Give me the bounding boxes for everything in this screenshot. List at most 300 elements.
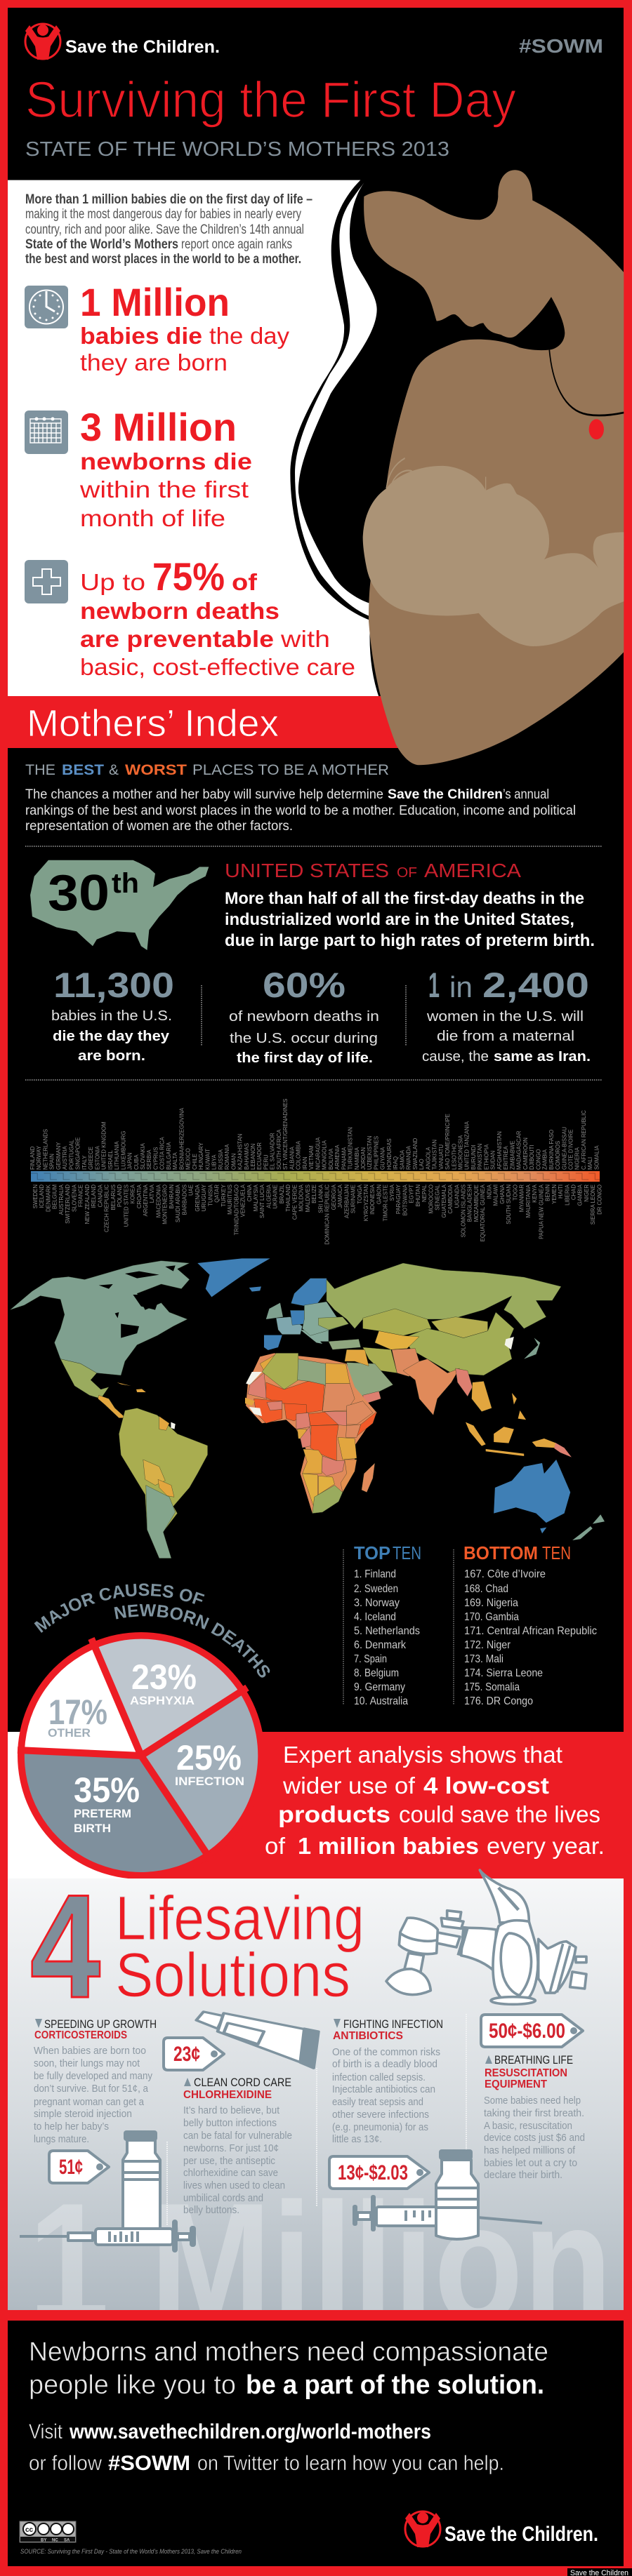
labels below strip: DENMARK: [45, 1184, 52, 1212]
list: bottom ten countries: 167. Côte d’Ivoire: [464, 1568, 546, 1580]
labels above strip: NETHERLANDS: [42, 1129, 49, 1170]
South Sudan and Ethiopia: [324, 1412, 347, 1426]
call to action text: Newborns and mothers need compassionate: [29, 2337, 548, 2367]
stat: 3 million: newborns die: [80, 448, 252, 474]
panel: call to action footer: [8, 2321, 624, 2566]
labels above strip: SOMALIA: [593, 1145, 600, 1170]
labels above strip: COSTA RICA: [159, 1137, 166, 1170]
labels above strip: KUWAIT: [204, 1149, 211, 1170]
heading: United States of America: AMERICA: [424, 860, 521, 881]
labels below strip: CAMBODIA: [447, 1184, 454, 1214]
column: resuscitation equipment: device costs just $6 and: [484, 2132, 585, 2144]
labels below strip: MAURITIUS: [227, 1184, 233, 1215]
column: resuscitation equipment: [484, 2053, 585, 2181]
stat: 1 in 2,400: [422, 966, 591, 1065]
labels above strip: GERMANY: [55, 1142, 62, 1170]
Central Asia: [375, 1331, 419, 1349]
Guianas: [159, 1416, 169, 1430]
stat: 11,300: are born.: [78, 1048, 145, 1064]
stat: 1 million: [80, 280, 290, 375]
labels above strip: SERBIA: [146, 1149, 152, 1170]
intro text: State of the World’s Mothers: [25, 237, 178, 252]
Mauritania: [248, 1373, 267, 1399]
labels above strip: ITALY: [81, 1155, 88, 1170]
slice label: other: 17%: [48, 1693, 107, 1732]
Indonesia: [466, 1393, 556, 1456]
column: chlorhexidine: belly button infections: [183, 2117, 277, 2129]
labels below strip: CANADA: [97, 1184, 103, 1207]
labels below strip: CAPE VERDE: [291, 1184, 298, 1220]
labels above strip: TAJIKISTAN: [432, 1140, 438, 1170]
labels above strip: TURKMENISTAN: [347, 1127, 354, 1170]
labels above strip: RWANDA: [406, 1145, 412, 1170]
intro text: report once again ranks: [181, 237, 292, 252]
New Zealand: [572, 1514, 605, 1540]
hashtag: #SOWM: [519, 35, 603, 57]
labels below strip: UAE: [188, 1184, 195, 1196]
labels above strip: CUBA: [133, 1154, 140, 1170]
labels above strip: SUDAN: [490, 1151, 496, 1170]
labels below strip: LIBERIA: [564, 1184, 570, 1206]
Central America: [98, 1395, 126, 1418]
Arabia: [347, 1363, 393, 1399]
intro paragraph: [25, 787, 576, 834]
labels below strip: PAPUA NEW GUINEA: [538, 1184, 544, 1239]
column: resuscitation equipment: BREATHING LIFE: [494, 2053, 573, 2067]
North America: [10, 1261, 190, 1375]
panel: United States: [30, 860, 595, 1066]
Africa base: [246, 1353, 377, 1514]
intro paragraph: The chances a mother and her baby will survive help determine: [25, 787, 383, 802]
stat: 11,300: die the day they: [53, 1029, 170, 1044]
callout: expert analysis: every year.: [487, 1833, 605, 1859]
labels above strip: PORTUGAL: [68, 1140, 74, 1170]
column: corticosteroids: soon, their lungs may not: [34, 2057, 140, 2069]
column: antibiotics: other severe infections: [332, 2109, 429, 2121]
Algeria: [262, 1353, 298, 1389]
labels below strip: MACEDONIA: [156, 1184, 162, 1217]
British Isles: [266, 1303, 283, 1319]
Myanmar: [456, 1368, 473, 1396]
China: [403, 1312, 514, 1375]
labels below strip: DR CONGO: [596, 1184, 603, 1215]
labels above strip: PHILIPPINES: [374, 1136, 379, 1170]
Tasmania: [540, 1528, 546, 1533]
column: resuscitation equipment: RESUSCITATION: [485, 2067, 567, 2079]
list: top ten countries: 7. Spain: [354, 1653, 387, 1665]
labels below strip: UNITED STATES: [123, 1184, 129, 1227]
labels below strip: MOLDOVA: [298, 1184, 305, 1211]
pendant: [589, 419, 604, 439]
panel: white intro background with hair line: [8, 180, 379, 698]
badge: Creative Commons: SA: [64, 2539, 70, 2543]
labels above strip: IRAQ: [393, 1156, 399, 1170]
West Africa: [254, 1399, 282, 1423]
Namibia and Botswana: [302, 1474, 317, 1507]
callout: expert analysis: wider use of: [282, 1773, 416, 1798]
Tanzania: [338, 1437, 357, 1460]
labels below strip: AUSTRALIA: [58, 1184, 65, 1215]
labels below strip: SAINT LUCIA: [259, 1184, 265, 1218]
column: antibiotics: [332, 2017, 443, 2145]
list: top ten countries: 9. Germany: [354, 1681, 405, 1693]
labels above strip: PAKISTAN: [477, 1144, 483, 1170]
list: bottom ten countries: 168. Chad: [464, 1583, 508, 1595]
South America: [119, 1408, 208, 1558]
band: white left of pie: [8, 1732, 148, 1878]
Italy and Balkans: [301, 1330, 329, 1344]
band: red expert analysis background: [141, 1732, 624, 1878]
labels below strip: BELIZE: [311, 1184, 317, 1203]
labels below strip: BELARUS: [110, 1184, 117, 1210]
labels above strip: COTE D’IVOIRE: [567, 1129, 574, 1170]
callout: expert analysis: 1 million babies: [298, 1833, 479, 1859]
labels below strip: NIGER: [584, 1184, 590, 1202]
intro text: country, rich and poor alike. Save the Children’s 14th annual: [25, 222, 304, 237]
subheading: best and worst: WORST: [125, 762, 187, 778]
intro paragraph: Save the Children: [388, 787, 503, 802]
Zambia: [322, 1456, 345, 1476]
subheading: best and worst: PLACES TO BE A MOTHER: [192, 762, 389, 778]
Middle East: [345, 1349, 369, 1366]
band: red strip below solutions: [0, 2310, 632, 2321]
call to action text: be a part of the solution.: [246, 2370, 544, 2400]
labels above strip: KAZAKHSTAN: [237, 1134, 243, 1170]
labels below strip: BANGLADESH: [467, 1184, 473, 1222]
stat: 1 in 2,400: women in the U.S. will: [426, 1009, 584, 1025]
labels above strip: BAHAMAS: [244, 1143, 250, 1170]
labels above strip: ECUADOR: [256, 1142, 263, 1170]
labels above strip: SAMOA: [399, 1149, 405, 1170]
column: antibiotics: One of the common risks: [332, 2046, 440, 2058]
Argentina and Chile: [146, 1486, 176, 1559]
US summary text: due in large part to high rates of preterm birth.: [225, 931, 595, 950]
labels below strip: GHANA: [499, 1184, 506, 1204]
labels below strip: EQUATORIAL GUINEA: [480, 1184, 486, 1241]
subheading: best and worst: [25, 762, 389, 778]
labels above strip: OMAN: [230, 1154, 237, 1170]
labels below strip: PARAGUAY: [395, 1184, 402, 1214]
labels below strip: YEMEN: [551, 1184, 558, 1204]
Bolivia and Paraguay: [143, 1460, 165, 1486]
labels below strip: GABON: [376, 1184, 382, 1204]
column: corticosteroids: SPEEDING UP GROWTH: [44, 2017, 157, 2031]
labels below strip: BENIN: [545, 1184, 551, 1201]
Iceland: [249, 1286, 261, 1292]
icon: calendar: [25, 411, 68, 454]
stat: 3 million: [79, 405, 252, 531]
labels below strip: AZERBAIJAN: [343, 1184, 350, 1218]
labels below strip: POLAND: [117, 1184, 123, 1207]
labels below strip: MAURITANIA: [525, 1184, 532, 1218]
heading: top ten: TEN: [393, 1542, 421, 1563]
stat: 75 percent: [80, 554, 355, 680]
column: antibiotics: Injectable antibiotics can: [332, 2083, 435, 2095]
Scandinavia: [291, 1279, 329, 1307]
stat: 75 percent: basic, cost-effective care: [80, 654, 355, 680]
labels below strip: MOZAMBIQUE: [473, 1184, 480, 1222]
labels above strip: ANGOLA: [425, 1147, 431, 1170]
labels above strip: CHILE: [192, 1154, 198, 1170]
labels below strip: IRELAND: [91, 1184, 97, 1208]
callout: expert analysis: could save the lives: [399, 1801, 600, 1827]
call to action text: people like you to: [29, 2370, 236, 2400]
list: bottom ten countries: 175. Somalia: [464, 1681, 520, 1693]
chart: country ranking strip: [29, 1099, 603, 1245]
labels below strip: BARBADOS: [181, 1184, 187, 1215]
labels below strip: ARGENTINA: [143, 1184, 149, 1217]
logo: Save the Children footer: Save the Children.: [445, 2523, 598, 2546]
price tag: 13 cents to 2.03 dollars: 13¢-$2.03: [338, 2161, 408, 2184]
labels above strip: GREECE: [88, 1147, 94, 1170]
Mozambique: [341, 1460, 357, 1493]
call to action text: on Twitter to learn how you can help.: [197, 2452, 504, 2475]
labels above strip: MONGOLIA: [322, 1140, 328, 1170]
labels above strip: MALTA: [172, 1152, 178, 1170]
labels above strip: LUXEMBOURG: [120, 1131, 126, 1170]
labels below strip: GAMBIA: [577, 1184, 584, 1206]
labels above strip: LEBANON: [250, 1144, 256, 1170]
column: resuscitation equipment: A basic, resuscitation: [484, 2120, 572, 2132]
stat: 1 million: they are born: [80, 349, 228, 375]
labels above strip: IRAN: [302, 1156, 308, 1170]
heading: United States of America: [225, 860, 521, 881]
icon: clock: [25, 286, 68, 328]
price tag: 51 cents: [49, 2151, 109, 2183]
labels above strip: COMOROS: [555, 1141, 561, 1170]
labels above strip: JORDAN: [360, 1147, 367, 1170]
labels below strip: QATAR: [214, 1184, 220, 1203]
Western Europe: [276, 1317, 302, 1335]
labels below strip: KENYA: [532, 1184, 538, 1203]
labels above strip: SWAZILAND: [412, 1137, 419, 1170]
necklace: [549, 350, 624, 415]
labels above strip: NICARAGUA: [315, 1137, 321, 1170]
labels below strip: MALDIVES: [305, 1184, 311, 1212]
stat: 1 million: babies die: [80, 323, 202, 349]
Turkey: [329, 1339, 361, 1349]
Madagascar: [362, 1463, 375, 1493]
call to action text: Visit: [29, 2420, 63, 2443]
heading: United States of America: UNITED STATES: [225, 860, 389, 881]
intro paragraph: representation of women are the other factors.: [25, 819, 293, 834]
labels above strip: AUSTRIA: [62, 1145, 68, 1170]
Central Africa: [308, 1412, 341, 1426]
labels above strip: LITHUANIA: [114, 1140, 120, 1170]
icon: medical cross: [25, 560, 68, 603]
column: resuscitation equipment: declare their birth.: [484, 2169, 562, 2181]
labels below strip: ALGERIA: [265, 1184, 272, 1208]
Gabon and Congo: [298, 1429, 306, 1440]
labels below strip: THAILAND: [285, 1184, 291, 1212]
labels above strip: ZAMBIA: [542, 1149, 548, 1170]
column: chlorhexidine: can be fatal for vulnerable: [183, 2130, 292, 2142]
stat: 1 million: 1 Million: [80, 280, 230, 324]
labels below strip: ICELAND: [39, 1184, 45, 1208]
labels below strip: FRANCE: [78, 1184, 84, 1207]
title: Surviving the First Day: [25, 72, 516, 128]
labels above strip: SLOVAKIA: [140, 1142, 146, 1170]
labels above strip: MALI: [587, 1157, 593, 1170]
Iran: [363, 1347, 397, 1373]
labels below strip: UGANDA: [454, 1184, 460, 1208]
labels below strip: EGYPT: [409, 1184, 415, 1203]
subtitle: STATE OF THE WORLD’S MOTHERS 2013: [25, 138, 449, 161]
slice label: asphyxia: 23%: [131, 1657, 197, 1697]
stat: 75 percent: 75%: [152, 554, 225, 599]
map: United States: [30, 860, 209, 950]
stat: 60%: 60%: [263, 966, 345, 1005]
labels below strip: SENEGAL: [435, 1184, 441, 1210]
list: top ten countries: 3. Norway: [354, 1597, 400, 1609]
logo: Save the Children: [25, 24, 220, 60]
labels above strip: ARMENIA: [334, 1144, 341, 1170]
Mali, Niger and Chad: [266, 1381, 324, 1413]
list: bottom ten countries: 172. Niger: [464, 1639, 511, 1651]
labels below strip: TUNISIA: [207, 1184, 213, 1206]
slice label: infection: 25%: [176, 1738, 242, 1777]
badge: Creative Commons: cc: [25, 2526, 34, 2534]
list: top ten countries: 2. Sweden: [354, 1583, 398, 1595]
price tag: 50 cents to 6 dollars: [481, 2015, 583, 2047]
labels below strip: SOLOMON ISLANDS: [461, 1184, 466, 1237]
heading: bottom ten: BOTTOM: [463, 1542, 538, 1563]
callout: expert analysis: 4 low-cost: [423, 1773, 549, 1798]
Caribbean: [117, 1382, 146, 1392]
panel: top ten: [343, 1542, 421, 1707]
labels below strip: TURKEY: [220, 1184, 227, 1207]
labels below strip: KYRGYZSTAN: [363, 1184, 369, 1221]
labels below strip: DOMINICAN REPUBLIC: [324, 1184, 331, 1245]
labels below strip: MONTENEGRO: [162, 1184, 169, 1224]
labels above strip: MADAGASCAR: [516, 1130, 522, 1170]
labels below strip: CZECH REPUBLIC: [104, 1184, 110, 1232]
Spain: [264, 1335, 282, 1350]
list: bottom ten countries: 170. Gambia: [464, 1611, 519, 1623]
column: chlorhexidine: CHLORHEXIDINE: [183, 2089, 272, 2101]
colour strip: [31, 1171, 600, 1182]
intro paragraph: rankings of the best and worst places in the world to be a mother. Education, income and political: [25, 803, 576, 818]
chart: causes of newborn deaths pie: [18, 1632, 265, 1879]
labels above strip: SINGAPORE: [75, 1137, 81, 1170]
callout: expert analysis: products: [278, 1801, 390, 1827]
labels above strip: NAMIBIA: [354, 1147, 360, 1170]
Papua New Guinea: [554, 1443, 572, 1457]
intro text: More than 1 million babies die on the first day of life –: [25, 192, 312, 207]
call to action text: or follow: [29, 2452, 102, 2475]
labels above strip: GUINEA-BISSAU: [561, 1127, 567, 1170]
labels above strip: BULGARIA: [166, 1142, 172, 1170]
stat: 11,300: 11,300: [53, 966, 174, 1005]
Yemen: [363, 1392, 381, 1404]
labels above strip: JAPAN: [126, 1152, 133, 1170]
Mongolia: [431, 1317, 488, 1338]
stat: 1 in 2,400: die from a maternal: [437, 1029, 574, 1044]
labels below strip: KOREA: [129, 1184, 136, 1203]
column: chlorhexidine: newborns. For just 10¢: [183, 2142, 279, 2154]
Mexico: [60, 1359, 109, 1399]
labels below strip: MALAWI: [493, 1184, 499, 1206]
heading: Lifesaving Solutions: Lifesaving: [115, 1883, 364, 1953]
column: corticosteroids: When babies are born too: [34, 2045, 146, 2057]
column: chlorhexidine: belly buttons.: [183, 2204, 239, 2216]
labels above strip: LIBYA: [211, 1154, 218, 1170]
icon: chlorhexidine tube: [197, 2012, 318, 2068]
labels above strip: BOSNIA/HERZEGOVINA: [178, 1107, 185, 1170]
stat: 3 million: month of life: [80, 505, 225, 531]
labels above strip: SPAIN: [49, 1154, 55, 1170]
list: bottom ten countries: 171. Central African Republic: [464, 1625, 597, 1637]
column: antibiotics: little as 13¢.: [332, 2133, 382, 2145]
column: corticosteroids: lungs mature.: [34, 2133, 89, 2145]
labels below strip: INDIA: [486, 1184, 493, 1199]
Australia: [494, 1460, 570, 1523]
list: bottom ten countries: 176. DR Congo: [464, 1695, 533, 1707]
labels below strip: SLOVENIA: [71, 1184, 77, 1212]
labels above strip: HUNGARY: [198, 1142, 204, 1170]
Kazakhstan: [363, 1309, 431, 1335]
list: bottom ten countries: 173. Mali: [464, 1653, 503, 1665]
intro paragraph: ’s annual: [503, 787, 549, 802]
heading: major causes of newborn deaths: NEWBORN DEATHS: [114, 1604, 270, 1678]
slice label: other: OTHER: [48, 1726, 91, 1740]
labels below strip: BELGIUM: [52, 1184, 58, 1209]
column: antibiotics: FIGHTING INFECTION: [343, 2017, 443, 2031]
slice label: asphyxia: ASPHYXIA: [130, 1694, 195, 1707]
Japan: [524, 1338, 540, 1359]
rank: 30th: [48, 865, 139, 921]
labels below strip: SURINAME: [350, 1184, 357, 1213]
callout: expert analysis: [265, 1742, 605, 1859]
heading: top ten: TOP: [354, 1542, 390, 1563]
list: top ten countries: 6. Denmark: [354, 1639, 407, 1651]
labels above strip: ZIMBABWE: [509, 1140, 515, 1170]
stat: 75 percent: Up to: [80, 569, 145, 595]
labels above strip: ROMANIA: [224, 1144, 230, 1170]
column: antibiotics: infection called sepsis.: [332, 2071, 426, 2083]
call to action text: www.savethechildren.org/world-mothers: [69, 2420, 431, 2443]
list: top ten countries: 1. Finland: [354, 1568, 396, 1580]
price tag: 23 cents: [164, 2038, 224, 2070]
badge: Creative Commons: BY: [41, 2539, 46, 2543]
heading: Lifesaving Solutions: [115, 1883, 364, 2010]
heading: top ten: [354, 1542, 421, 1563]
Angola: [302, 1449, 322, 1474]
price tag: 23 cents: 23¢: [173, 2043, 200, 2066]
labels below strip: VENEZUELA: [240, 1184, 246, 1217]
call to action text: #SOWM: [108, 2452, 190, 2475]
column: corticosteroids: to help her baby’s: [34, 2121, 109, 2133]
labels below strip: TIMOR-LESTE: [383, 1184, 389, 1221]
panel: bottom ten: [454, 1542, 597, 1707]
labels below strip: TOGO: [512, 1184, 518, 1201]
band: Mothers' Index background: [0, 696, 402, 748]
column: chlorhexidine: per use, the antiseptic: [183, 2155, 275, 2167]
column: corticosteroids: pregnant woman can get a: [34, 2096, 145, 2108]
stat: 1 in 2,400: 2,400: [482, 966, 589, 1005]
call to action text: [29, 2337, 548, 2475]
list: top ten countries: 4. Iceland: [354, 1611, 396, 1623]
labels above strip: UNITED TANZANIA: [464, 1121, 470, 1170]
labels above strip: LESOTHO: [451, 1144, 457, 1170]
Eastern Europe: [302, 1302, 349, 1335]
column: chlorhexidine: It’s hard to believe, but: [183, 2104, 280, 2116]
labels below strip: JAMAICA: [337, 1184, 343, 1208]
labels above strip: UZBEKISTAN: [367, 1136, 373, 1170]
column: resuscitation equipment: EQUIPMENT: [485, 2078, 547, 2090]
price tag: 51 cents: 51¢: [59, 2156, 83, 2179]
US summary text: More than half of all the first-day deaths in the: [225, 889, 584, 908]
